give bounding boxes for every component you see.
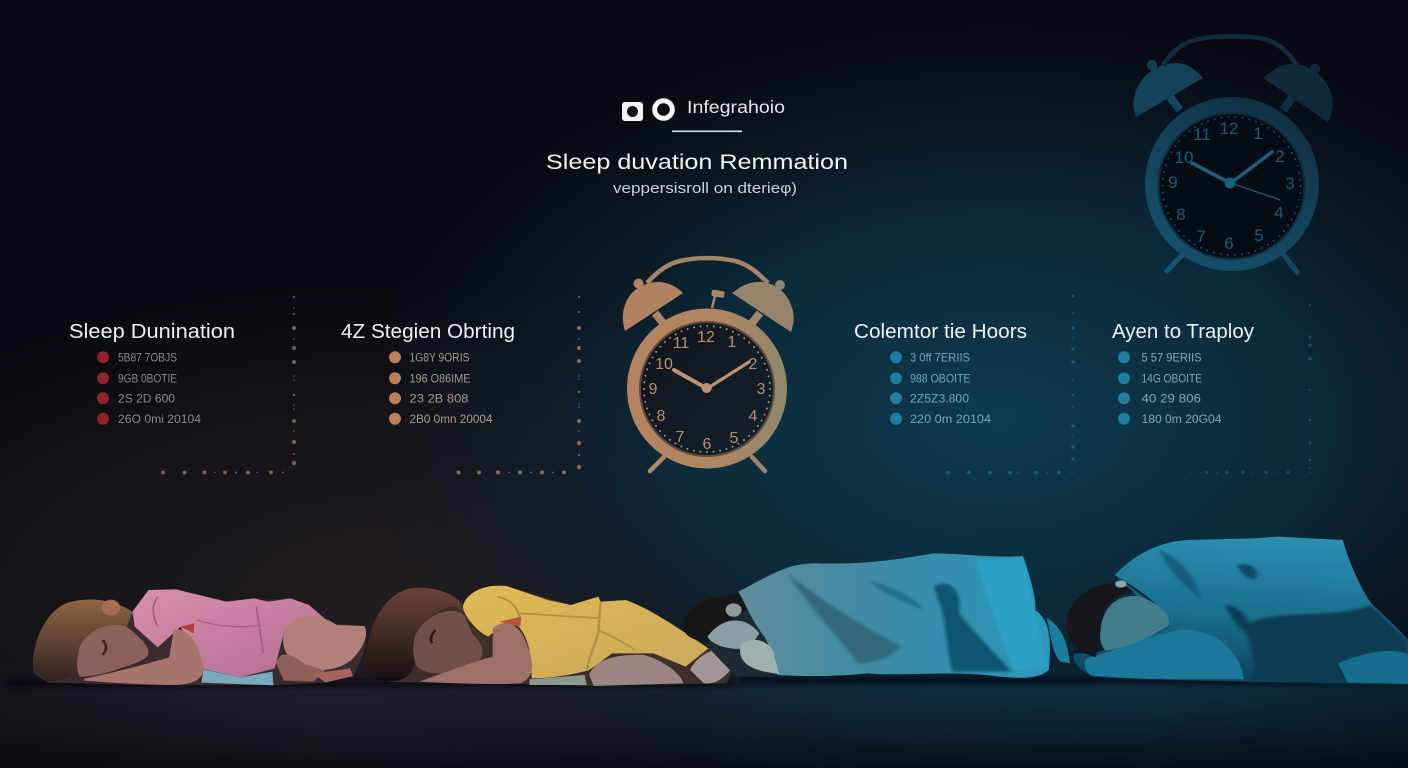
numerals: 5 [1254,226,1264,245]
panel heading: 4Z Stegien Obrting [341,321,515,343]
list [97,350,201,426]
hands [1192,152,1280,200]
body underlay [33,589,366,685]
numerals: 2 [1275,147,1285,166]
clock handle [647,258,768,283]
shirt folds [153,597,263,653]
blanket edge [1046,617,1070,663]
cloth [529,675,587,685]
list [890,350,991,426]
numerals: 11 [1193,125,1211,144]
numerals [1168,119,1295,253]
arm [84,629,204,685]
list: 2B0 0mn 20004 [410,412,493,426]
list: 9GB 0BOTIE [118,372,177,386]
body underlay [366,586,740,686]
blanket [1073,537,1408,684]
list: 5B87 7OBJS [118,350,177,364]
ear [726,603,742,617]
blanket [738,553,1050,678]
ear [102,600,120,616]
clock case [627,308,787,468]
title block [546,97,848,197]
clock numerals: 7 [676,429,685,446]
clock face [640,322,774,456]
sleeve [181,623,194,633]
clock numerals: 8 [657,408,666,425]
list: 180 0m 20G04 [1142,412,1222,426]
cloth [201,669,273,685]
hair [683,595,752,643]
icon: rounded square [622,102,643,121]
foot [314,668,353,683]
shirt [463,586,709,678]
hair [366,588,464,682]
panel: time to deploy [1112,304,1312,474]
hair [1066,583,1134,657]
clock numerals: 6 [703,436,712,453]
panel: completion hours [854,295,1075,474]
list: 5 57 9ERIIS [1142,350,1202,364]
bells [1133,60,1333,122]
clock numerals: 2 [749,356,758,373]
icon: central alarm clock [623,258,794,471]
closed eye [103,640,106,655]
numerals: 1 [1253,124,1263,143]
forearm [690,648,740,683]
numerals: 3 [1285,174,1295,193]
list: 23 2B 808 [410,392,469,406]
heading: Sleep duvation Remmation [546,151,848,174]
shirt folds [497,597,635,670]
numerals: 12 [1220,119,1238,138]
clock numerals [649,329,766,453]
shirt [132,589,332,677]
list [389,350,493,426]
list: 40 29 806 [1142,392,1201,406]
clock numerals: 4 [749,408,758,425]
panel heading: Ayen to Traploy [1112,321,1254,343]
list: 2S 2D 600 [118,392,175,406]
face [708,621,759,649]
arm fold [1085,629,1244,679]
list: 3 0ff 7ERIIS [910,350,970,364]
clock numerals: 5 [730,430,739,447]
numerals: 10 [1175,148,1193,167]
sleeve [500,617,521,627]
icon: faded alarm clock [1133,36,1333,272]
subtitle: veppersisroll on dterieφ) [613,180,797,197]
panel heading: Colemtor tie Hoors [854,321,1027,343]
dotted frame [161,296,296,474]
handle [1163,36,1297,65]
list: 988 OBOITE [910,372,970,386]
list: 26O 0mi 20104 [118,412,201,426]
face [1158,113,1304,259]
illustration: child under blanket [683,553,1070,678]
dotted frame [946,295,1075,474]
list [1118,350,1222,426]
illustration: floor shadow [5,677,1408,686]
illustration: older child under blanket [1066,537,1408,684]
brand label: Infegrahoio [687,97,785,117]
clock numerals: 3 [757,381,766,398]
icon: ring [655,101,672,118]
clock posts and feet [650,313,765,471]
posts and feet [1167,97,1297,272]
clock hands [674,362,749,393]
knee [589,655,683,686]
dotted frame [457,296,581,474]
numerals: 8 [1176,205,1186,224]
minute dots [644,326,770,452]
list: 1G8Y 9ORIS [410,350,470,364]
panel heading: Sleep Dunination [69,321,235,343]
list: 220 0m 20104 [910,412,991,426]
panel: sleep duration [69,296,296,474]
face [1100,596,1169,651]
list: 14G OBOITE [1142,372,1202,386]
numerals: 6 [1224,234,1234,253]
illustration: child in yellow shirt [366,586,740,686]
body underlay [683,595,783,677]
illustration: child in pink shirt [33,589,366,685]
pillow corner [740,640,779,674]
clock stem [711,289,725,308]
list: 196 O86IME [410,372,470,386]
bent arm [283,616,366,670]
body underlay [1094,575,1188,663]
blanket shadows [1159,550,1408,684]
lower cloth [1338,651,1408,684]
arm [419,623,532,684]
face [77,625,149,677]
ear [1115,580,1126,588]
hair [33,600,132,682]
case [1145,97,1319,271]
clock numerals: 10 [655,356,673,373]
panel: stage chart [341,296,581,474]
blanket shadows [788,558,1046,672]
leg [276,655,325,682]
minute dots [1162,117,1300,255]
clock numerals: 12 [697,329,715,346]
closed eye [431,630,435,643]
clock bells [623,278,794,332]
clock numerals: 11 [673,335,689,352]
numerals: 4 [1274,203,1284,222]
numerals: 7 [1196,227,1206,246]
clock numerals: 1 [728,334,737,351]
numerals: 9 [1168,173,1178,192]
face [413,611,482,674]
list: 2Z5Z3.800 [910,392,969,406]
dotted frame [1191,304,1312,474]
clock numerals: 9 [649,381,658,398]
